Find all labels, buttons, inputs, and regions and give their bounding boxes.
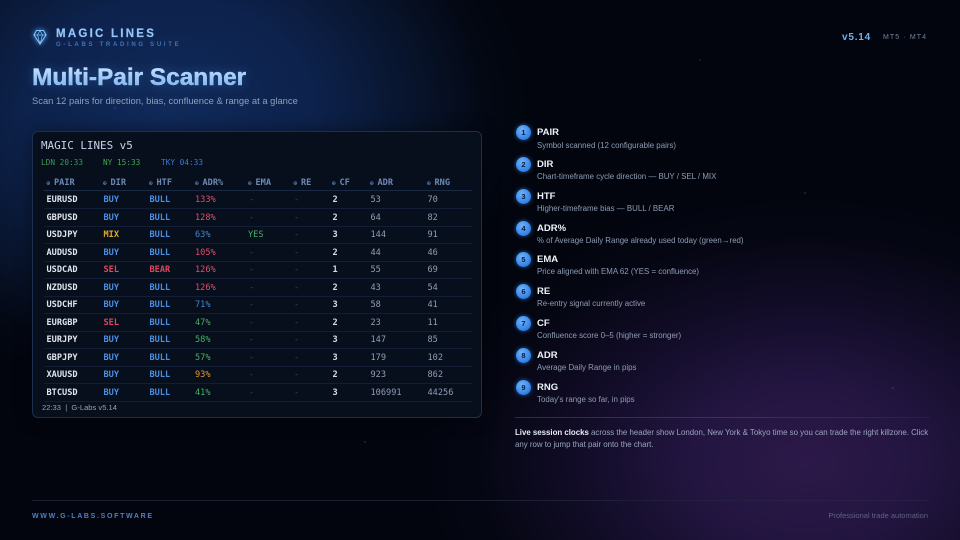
legend item: ADR: [513, 345, 636, 372]
legend item: ADR: Average Daily Range in pips: [537, 363, 636, 372]
legend item: DIR: Chart-timeframe cycle direction — BUY / SEL / MIX: [537, 172, 716, 181]
table rows: 2: [332, 283, 338, 293]
table rows: GBPJPY: [46, 353, 78, 363]
table rows: 862: [428, 370, 443, 380]
table rows: -: [294, 230, 299, 240]
title: Multi-Pair Scanner: [32, 64, 246, 90]
brand subtitle: G-LABS TRADING SUITE: [56, 42, 181, 48]
table rows: 144: [370, 230, 386, 240]
table rows: 44256: [428, 388, 453, 398]
table rows: 179: [370, 353, 386, 363]
table rows: BUY: [104, 353, 119, 363]
table header: [44, 178, 472, 191]
table rows: 53: [370, 195, 381, 205]
table rows: 55: [370, 265, 381, 275]
table rows: BULL: [150, 370, 170, 380]
table rows: BUY: [104, 213, 119, 223]
legend item: EMA: [513, 249, 699, 276]
table rows: 2: [332, 248, 338, 258]
table header: RNG: [434, 178, 450, 188]
table rows: 126%: [195, 283, 216, 293]
table header: ⊕: [46, 180, 50, 186]
table rows: 70: [428, 195, 438, 205]
table rows: USDCHF: [46, 300, 78, 310]
table header: ⊕: [427, 180, 431, 186]
legend item: ADR: 8: [521, 351, 526, 360]
table rows: 133%: [195, 195, 216, 205]
legend item: RE: 6: [521, 287, 526, 296]
table rows: 3: [332, 300, 338, 310]
table rows: BULL: [150, 213, 170, 223]
table rows: EURJPY: [46, 335, 78, 345]
panel status line: 22:33 | G-Labs v5.14: [42, 403, 117, 412]
legend item: CF: [513, 313, 681, 340]
brand name: MAGIC LINES: [56, 28, 156, 40]
table rows: 58: [370, 300, 381, 310]
legend item: ADR%: ADR%: [537, 223, 566, 234]
table rows: SEL: [104, 265, 119, 275]
legend item: RE: [513, 281, 645, 308]
table rows: BULL: [150, 388, 170, 398]
session clocks: LDN 20:33: [41, 158, 83, 167]
legend item: RNG: Today's range so far, in pips: [537, 394, 635, 404]
table rows: 2: [332, 195, 338, 205]
table rows: 63%: [195, 230, 211, 240]
table rows: 105%: [195, 248, 216, 258]
legend item: HTF: HTF: [537, 191, 555, 202]
table rows: [44, 195, 472, 402]
table rows: YES: [248, 230, 264, 240]
session clocks: [41, 158, 203, 167]
table rows: AUDUSD: [46, 248, 78, 258]
table rows: -: [249, 265, 254, 275]
table rows: -: [249, 353, 254, 363]
subtitle: Scan 12 pairs for direction, bias, confluence & range at a glance: [32, 96, 298, 106]
table rows: -: [249, 213, 254, 223]
table header: ADR: [378, 178, 393, 188]
table rows: -: [249, 335, 254, 345]
footer tagline: Professional trade automation: [828, 510, 928, 520]
table rows: BUY: [104, 388, 119, 398]
table rows: 82: [428, 213, 438, 223]
table rows: 91: [428, 230, 438, 240]
table rows: -: [294, 283, 299, 293]
table header: RE: [301, 178, 311, 188]
table rows: BULL: [150, 195, 170, 205]
legend item: EMA: Price aligned with EMA 62 (YES = confluence): [537, 267, 699, 276]
table rows: BUY: [104, 195, 119, 205]
table rows: BUY: [104, 283, 119, 293]
legend item: HTF: Higher-timeframe bias — BULL / BEAR: [537, 204, 674, 213]
legend item: RNG: RNG: [537, 382, 558, 393]
icon: diamond logo: [30, 26, 50, 47]
legend item: HTF: 3: [521, 192, 526, 201]
table rows: 923: [370, 370, 386, 380]
legend item: PAIR: 1: [521, 128, 526, 137]
table header: ⊕: [248, 180, 252, 186]
table rows: -: [249, 388, 254, 398]
table rows: BULL: [150, 230, 170, 240]
legend item: CF: Confluence score 0–5 (higher = stronger): [537, 331, 681, 340]
table rows: -: [294, 335, 299, 345]
table rows: -: [294, 370, 299, 380]
table rows: EURGBP: [46, 318, 78, 328]
legend item: ADR: ADR: [537, 350, 558, 361]
legend item: RNG: 9: [521, 383, 526, 392]
legend item: RNG: [513, 377, 635, 404]
table rows: 44: [370, 248, 381, 258]
table rows: NZDUSD: [46, 283, 78, 293]
legend item: RE: RE: [537, 286, 550, 297]
table rows: 1: [332, 265, 338, 275]
legend item: ADR%: [513, 218, 744, 245]
table rows: 2: [332, 370, 338, 380]
legend item: PAIR: Symbol scanned (12 configurable pairs): [537, 140, 676, 150]
table rows: 128%: [195, 213, 216, 223]
table rows: BUY: [104, 248, 119, 258]
table header: EMA: [256, 178, 271, 188]
table rows: USDJPY: [46, 230, 78, 240]
table rows: 41%: [195, 388, 211, 398]
table header: HTF: [156, 178, 172, 188]
table rows: -: [294, 388, 299, 398]
legend item: EMA: EMA: [537, 254, 558, 265]
table header: ⊕: [103, 180, 107, 186]
table rows: 2: [332, 318, 338, 328]
table rows: -: [249, 300, 254, 310]
table rows: USDCAD: [46, 265, 78, 275]
table header: ⊕: [149, 180, 153, 186]
table rows: 71%: [195, 300, 211, 310]
version: v5.14: [842, 32, 871, 43]
legend item: RE: Re-entry signal currently active: [537, 299, 645, 308]
table rows: 3: [332, 388, 338, 398]
table rows: -: [249, 283, 254, 293]
table rows: -: [249, 248, 254, 258]
legend item: CF: 7: [521, 319, 526, 328]
table header: ⊕: [195, 180, 199, 186]
table rows: -: [294, 248, 299, 258]
table header: CF: [340, 178, 350, 188]
table rows: EURUSD: [46, 195, 78, 205]
table rows: BUY: [104, 300, 119, 310]
legend item: ADR%: 4: [521, 224, 526, 233]
table rows: XAUUSD: [46, 370, 78, 380]
table rows: BULL: [150, 318, 170, 328]
session clocks: TKY 04:33: [161, 158, 203, 167]
table rows: BUY: [104, 370, 119, 380]
table rows: 11: [428, 318, 438, 328]
table rows: -: [294, 265, 299, 275]
footer url: WWW.G-LABS.SOFTWARE: [32, 512, 154, 520]
table rows: 54: [428, 283, 438, 293]
session clocks: NY 15:33: [103, 158, 140, 167]
panel heading: MAGIC LINES v5: [41, 139, 133, 152]
table header: ⊕: [370, 180, 374, 186]
legend item: DIR: 2: [521, 160, 526, 169]
table rows: -: [294, 353, 299, 363]
table rows: BULL: [150, 283, 170, 293]
table rows: SEL: [104, 318, 119, 328]
table rows: 23: [370, 318, 381, 328]
table rows: 43: [370, 283, 381, 293]
table rows: BULL: [150, 335, 170, 345]
table header: PAIR: [54, 178, 75, 188]
session clocks note: Live session clocks across the header show London, New York & Tokyo time so you can trade the right killzone. Click any row to jump that pair onto the chart.: [515, 428, 928, 449]
legend item: CF: CF: [537, 318, 550, 329]
table rows: 57%: [195, 353, 211, 363]
table rows: 46: [428, 248, 438, 258]
table header: ⊕: [332, 180, 336, 186]
legend item: PAIR: [513, 122, 676, 150]
table header: DIR: [110, 178, 126, 188]
legend item: EMA: 5: [521, 255, 526, 264]
table rows: -: [294, 213, 299, 223]
table rows: 3: [332, 353, 338, 363]
table rows: BULL: [150, 248, 170, 258]
table rows: -: [294, 195, 299, 205]
table header: ADR%: [202, 178, 223, 188]
table rows: 64: [370, 213, 381, 223]
table rows: MIX: [104, 230, 119, 240]
table rows: BULL: [150, 300, 170, 310]
table rows: 93%: [195, 370, 211, 380]
table rows: 47%: [195, 318, 211, 328]
table rows: 102: [428, 353, 443, 363]
table rows: BULL: [150, 353, 170, 363]
legend: [513, 122, 744, 404]
table rows: 2: [332, 213, 338, 223]
table rows: 3: [332, 335, 338, 345]
table rows: -: [294, 318, 299, 328]
table rows: GBPUSD: [46, 213, 78, 223]
table rows: 126%: [195, 265, 216, 275]
table rows: 58%: [195, 335, 211, 345]
table rows: BTCUSD: [46, 388, 78, 398]
legend item: HTF: [513, 186, 674, 213]
table rows: 106991: [370, 388, 402, 398]
table rows: 3: [332, 230, 338, 240]
table rows: BUY: [104, 335, 119, 345]
table header: ⊕: [294, 180, 297, 186]
table rows: -: [249, 318, 254, 328]
platforms: MT5 · MT4: [883, 34, 927, 41]
table rows: -: [294, 300, 299, 310]
table rows: 69: [428, 265, 438, 275]
table rows: -: [249, 195, 254, 205]
table rows: 41: [428, 300, 438, 310]
legend item: DIR: DIR: [537, 159, 553, 170]
table rows: BEAR: [150, 265, 170, 275]
legend item: ADR%: % of Average Daily Range already used today (green→red): [537, 236, 744, 245]
table rows: -: [249, 370, 254, 380]
panel: scanner table: [32, 131, 482, 418]
legend item: PAIR: PAIR: [537, 127, 559, 138]
legend item: DIR: [513, 154, 716, 181]
table rows: 147: [370, 335, 386, 345]
table rows: 85: [428, 335, 438, 345]
